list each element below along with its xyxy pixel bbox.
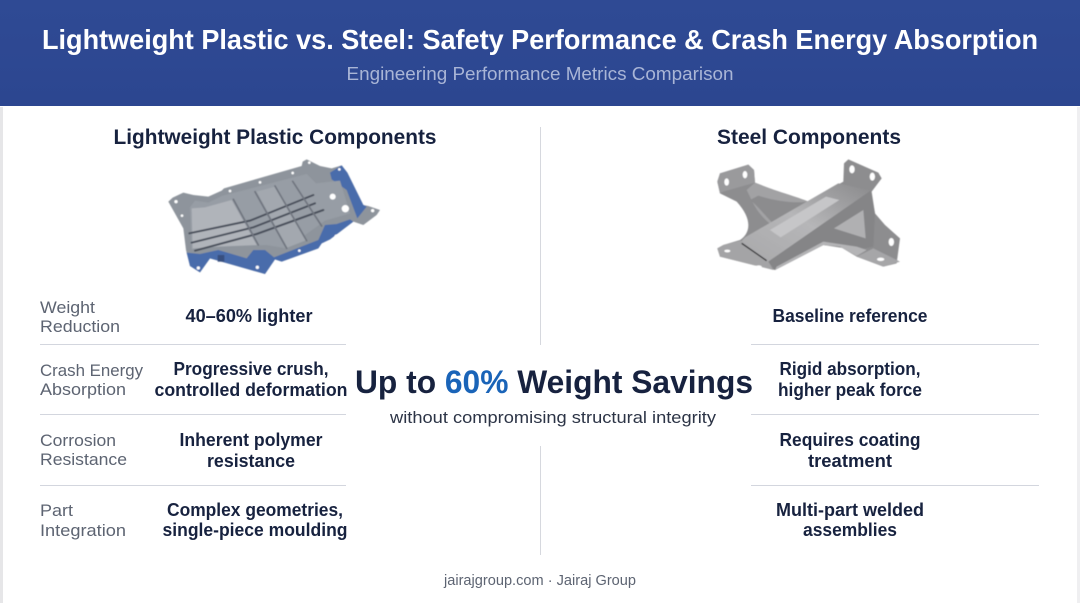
row: crash energy absorption: [40, 359, 348, 400]
row: weight reduction: [40, 298, 312, 336]
row: crash energy absorption: controlled deformation: [154, 380, 348, 400]
row: part integration: Integration: [40, 521, 126, 540]
row: welded: [776, 500, 924, 540]
row: part integration: Complex geometries,: [167, 500, 343, 520]
row: baseline: Baseline reference: [772, 306, 928, 326]
row: corrosion resistance: Resistance: [40, 450, 127, 469]
row: rigid absorption: [778, 359, 922, 400]
centre divider top: [540, 127, 542, 345]
metrics table: steel: [751, 306, 1039, 540]
row: rigid absorption: higher peak force: [778, 380, 922, 400]
row: crash energy absorption: Crash Energy: [40, 361, 143, 380]
row: coating: Requires coating: [780, 430, 920, 450]
centre divider bottom: [540, 446, 542, 555]
callout subtext: without compromising structural integrity: [389, 408, 717, 427]
footer: jairajgroup.com · Jairaj Group: [443, 573, 636, 589]
image: plastic component: [168, 159, 380, 274]
row: crash energy absorption: Progressive crush,: [174, 359, 328, 379]
header banner: [0, 0, 1080, 106]
callout headline: Up to 60% Weight Savings: [355, 364, 753, 400]
row: rigid absorption: Rigid absorption,: [780, 359, 920, 379]
row: part integration: Part: [40, 501, 73, 520]
row: corrosion resistance: Corrosion: [40, 431, 116, 450]
row: crash energy absorption: Absorption: [40, 380, 126, 399]
row: coating: treatment: [808, 451, 892, 471]
row: welded: Multi-part welded: [776, 500, 924, 520]
heading: steel components: Steel Components: [717, 126, 901, 149]
row: corrosion resistance: resistance: [207, 451, 295, 471]
title: Lightweight Plastic vs. Steel: Safety Performance & Crash Energy Absorption: [42, 24, 1038, 55]
subtitle: Engineering Performance Metrics Comparison: [346, 64, 734, 84]
row: corrosion resistance: Inherent polymer: [180, 430, 322, 450]
row: corrosion resistance: [40, 430, 322, 471]
heading: plastic components: Lightweight Plastic Components: [114, 126, 436, 149]
row: welded: assemblies: [803, 520, 897, 540]
row: coating: [780, 430, 920, 471]
row: weight reduction: Reduction: [40, 317, 120, 336]
row: weight reduction: 40–60% lighter: [186, 306, 312, 326]
image: steel bracket: [717, 159, 900, 270]
metrics table: plastic: [40, 298, 348, 540]
central callout: [355, 364, 753, 427]
row: weight reduction: Weight: [40, 298, 95, 317]
row: part integration: [40, 500, 348, 540]
row: part integration: single-piece moulding: [162, 520, 348, 540]
